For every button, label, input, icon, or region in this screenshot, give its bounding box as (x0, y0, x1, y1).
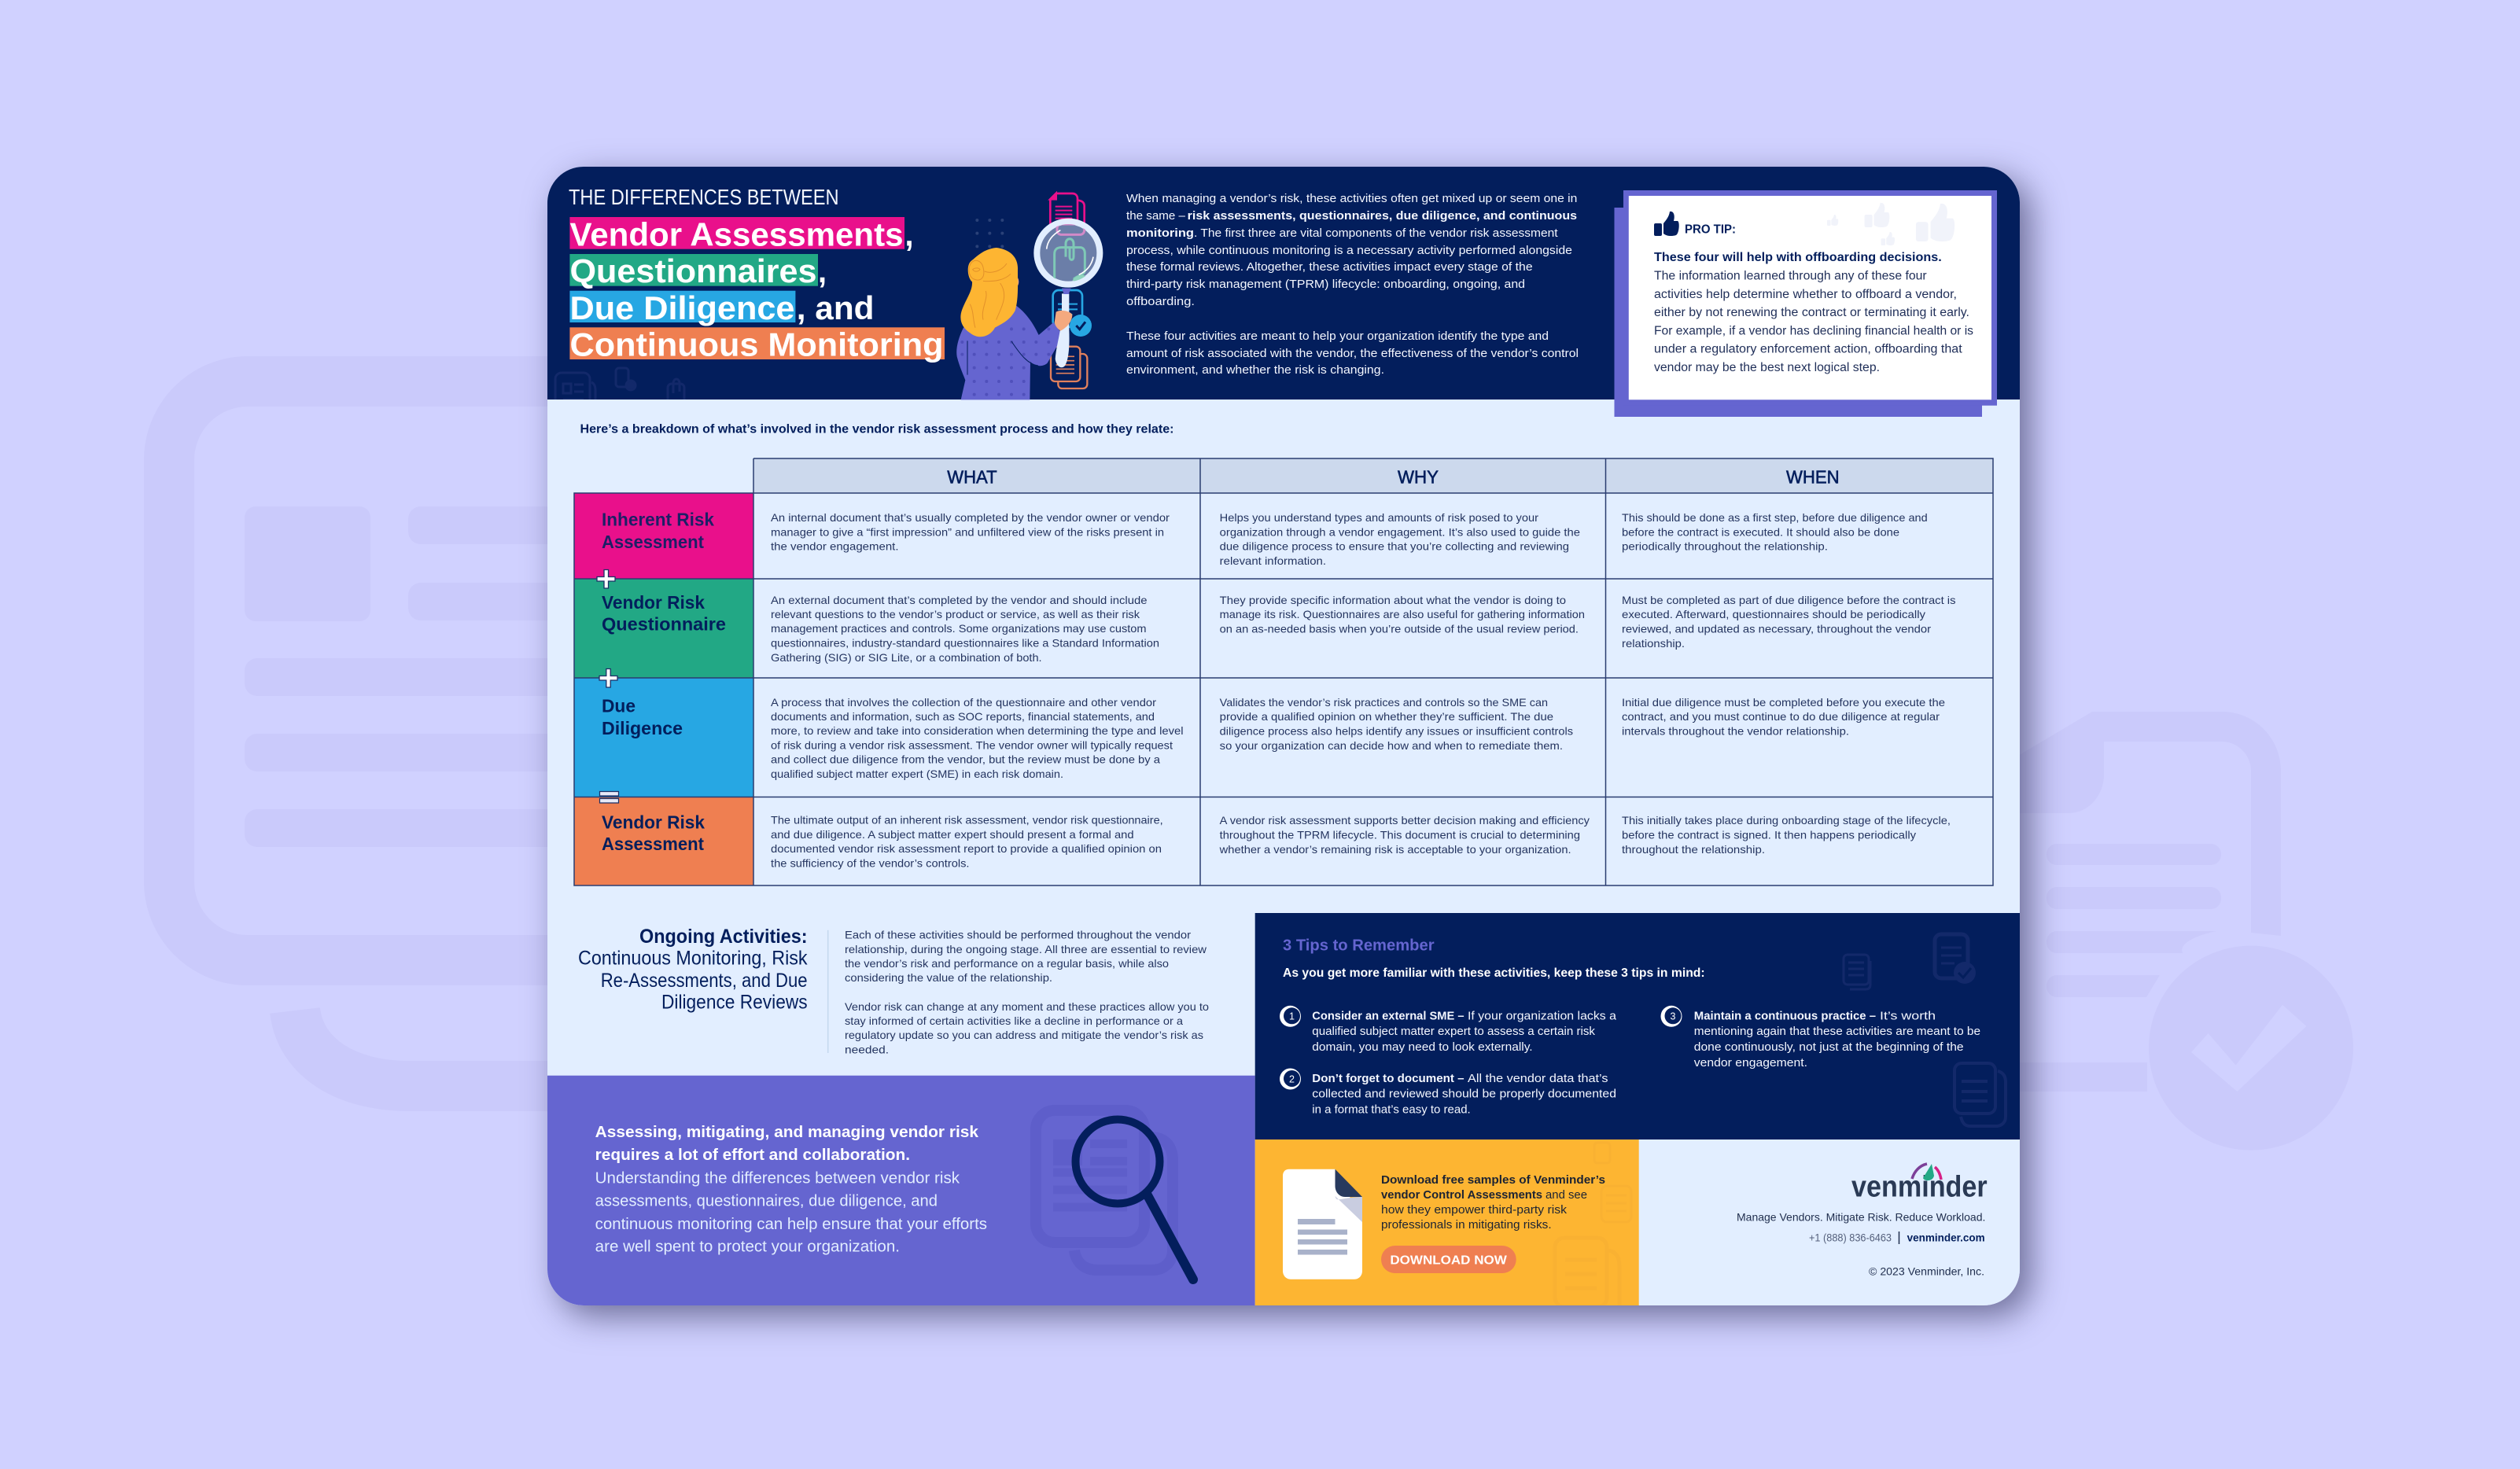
why column text: due diligence process to ensure that you’re collecting and reviewing (1220, 539, 1569, 552)
why column text: They provide specific information about what the vendor is doing to (1220, 594, 1566, 606)
tip 1: qualified subject matter expert to assess a certain risk (1312, 1025, 1595, 1038)
what column text: relevant questions to the vendor’s product or service, as well as their risk (771, 608, 1140, 620)
intro text: offboarding. (1126, 295, 1195, 308)
when column text: contract, and you must continue to do due diligence at regular (1622, 710, 1940, 723)
when column text: Initial due diligence must be completed before you execute the (1622, 696, 1945, 709)
intro text: . The first three are vital components of the vendor risk assessment (1194, 226, 1558, 240)
ghost tip icons (1844, 934, 2006, 1126)
table header row: WHEN (1786, 467, 1840, 488)
closing text: are well spent to protect your organization. (595, 1238, 900, 1255)
contact line (1809, 1232, 1985, 1244)
tagline: Manage Vendors. Mitigate Risk. Reduce Workload. (1737, 1211, 1985, 1224)
tip 3: done continuously, not just at the beginning of the (1694, 1040, 1964, 1054)
tips intro: As you get more familiar with these activities, keep these 3 tips in mind: (1283, 966, 1705, 980)
tip 2: All the vendor data that’s (1468, 1072, 1608, 1085)
row label: inherent risk assessment (574, 493, 753, 579)
row label: vendor risk questionnaire: Vendor Risk (602, 592, 705, 613)
intro text: risk assessments, questionnaires, due diligence, and continuous (1188, 209, 1577, 223)
what column text: The ultimate output of an inherent risk assessment, vendor risk questionnaire, (771, 813, 1163, 826)
closing text: Understanding the differences between vendor risk (595, 1170, 960, 1187)
when column text (1622, 511, 1955, 856)
intro text: When managing a vendor’s risk, these activities often get mixed up or seem one in (1126, 192, 1577, 205)
panel: 3 tips to remember (1255, 913, 2021, 1139)
tip 1: If your organization lacks a (1468, 1010, 1617, 1022)
why column text: manage its risk. Questionnaires are also useful for gathering information (1220, 608, 1585, 620)
title: highlighted terms: , (818, 252, 827, 289)
tip 3: Maintain a continuous practice – (1694, 1010, 1876, 1022)
ongoing activities text: relationship, during the ongoing stage. All three are essential to review (845, 943, 1207, 955)
pro tip body: vendor may be the best next logical step. (1654, 361, 1880, 374)
magnifying glass (1056, 293, 1070, 367)
row label: vendor risk questionnaire (574, 579, 753, 678)
what column text: qualified subject matter expert (SME) in each risk domain. (771, 768, 1063, 780)
woman body (956, 305, 1063, 399)
intro text: environment, and whether the risk is changing. (1126, 363, 1384, 377)
tip 1 (1280, 1006, 1617, 1054)
tip 3 (1661, 1006, 1980, 1070)
pro tip label: PRO TIP: (1685, 223, 1736, 237)
row label: vendor risk assessment (574, 797, 753, 885)
contact line: +1 (888) 836-6463 (1809, 1232, 1892, 1244)
intro text: these formal reviews. Altogether, these activities impact every stage of the (1126, 260, 1533, 274)
tip 1: domain, you may need to look externally. (1312, 1040, 1533, 1054)
what column text: of risk during a vendor risk assessment. The vendor owner will typically request (771, 739, 1173, 752)
operator: plus (597, 569, 615, 588)
tip 2: collected and reviewed should be properly documented (1312, 1087, 1616, 1101)
row label: inherent risk assessment: Inherent Risk (602, 510, 714, 530)
row label: vendor risk questionnaire: Questionnaire (602, 613, 726, 634)
why column text: provide a qualified opinion on whether they’re sufficient. The due (1220, 710, 1553, 723)
table header row (753, 458, 1993, 493)
what column text: documents and information, such as SOC reports, financial statements, and (771, 710, 1155, 723)
icon: document (1283, 1169, 1362, 1279)
intro text (1126, 192, 1579, 377)
panel: download call to action (1255, 1139, 1639, 1307)
download text: and see (1546, 1188, 1587, 1202)
closing text: continuous monitoring can help ensure that your efforts (595, 1216, 987, 1233)
icon: magenta document (1050, 193, 1085, 228)
tip 3: It’s worth (1880, 1010, 1936, 1022)
panel: ongoing activities heading: Re-Assessments, and Due (601, 970, 808, 992)
ongoing activities text (845, 928, 1209, 1055)
what column text: the sufficiency of the vendor’s controls. (771, 857, 969, 870)
infographic card (547, 167, 2020, 1305)
copyright: © 2023 Venminder, Inc. (1869, 1265, 1984, 1277)
intro text: third-party risk management (TPRM) lifecycle: onboarding, ongoing, and (1126, 278, 1525, 291)
when column text: before the contract is signed. It then happens periodically (1622, 829, 1916, 841)
what column text: management practices and controls. Some organizations may use custom (771, 622, 1147, 635)
what column text: documented vendor risk assessment report to provide a qualified opinion on (771, 842, 1162, 855)
icon: ghost document (1036, 1110, 1173, 1270)
when column text: before the contract is executed. It should also be done (1622, 525, 1899, 538)
icon: blue document with check (1053, 290, 1092, 337)
when column text: executed. Afterward, questionnaires should be periodically (1622, 608, 1925, 620)
pro tip body: under a regulatory enforcement action, offboarding that (1654, 343, 1962, 355)
when column text: Must be completed as part of due diligence before the contract is (1622, 594, 1955, 606)
when column text: reviewed, and updated as necessary, throughout the vendor (1622, 623, 1931, 635)
closing text (595, 1124, 987, 1255)
button: download now: DOWNLOAD NOW (1390, 1254, 1508, 1268)
what column text (771, 511, 1184, 870)
ongoing activities text: Each of these activities should be performed throughout the vendor (845, 928, 1191, 941)
tip 2: in a format that’s easy to read. (1312, 1103, 1471, 1117)
row label: due diligence: Due (602, 695, 636, 716)
title: highlighted terms: , (904, 216, 914, 253)
tip 1: Consider an external SME – (1312, 1010, 1464, 1022)
why column text: so your organization can decide how and when to remediate them. (1220, 739, 1563, 752)
download text: how they empower third-party risk (1381, 1203, 1568, 1217)
panel: ongoing activities heading: Ongoing Activities: (639, 926, 808, 948)
what column text: A process that involves the collection of the questionnaire and other vendor (771, 696, 1156, 709)
tip 2: Don’t forget to document – (1312, 1072, 1464, 1085)
closing text: assessments, questionnaires, due diligence, and (595, 1192, 938, 1209)
row label: inherent risk assessment: Assessment (602, 532, 704, 552)
when column text: periodically throughout the relationship. (1622, 539, 1828, 552)
woman hair (960, 248, 1018, 337)
table (574, 458, 1993, 885)
table grid (574, 458, 1993, 885)
intro text: amount of risk associated with the vendor, the effectiveness of the vendor’s control (1126, 347, 1579, 360)
pro tip body: activities help determine whether to offboard a vendor, (1654, 288, 1957, 301)
operator: plus (599, 668, 617, 687)
tip 3: mentioning again that these activities are meant to be (1694, 1025, 1980, 1038)
title: highlighted terms (569, 216, 945, 363)
why column text: on an as-needed basis when you’re outside of the usual review period. (1220, 623, 1579, 635)
what column text: and due diligence. A subject matter expert should present a formal and (771, 828, 1134, 841)
what column text: more, to review and take into consideration when determining the type and level (771, 724, 1184, 737)
row label: due diligence: Diligence (602, 718, 683, 738)
logo: venminder: venminder (1851, 1171, 1988, 1204)
why column text: A vendor risk assessment supports better decision making and efficiency (1220, 814, 1590, 827)
icon: magnifying glass (1076, 1120, 1193, 1279)
what column text: questionnaires, industry-standard questionnaires like a Standard Information (771, 637, 1159, 650)
row label: vendor risk assessment: Assessment (602, 834, 704, 854)
title: highlighted terms: , and (797, 289, 875, 326)
why column text: relevant information. (1220, 554, 1326, 567)
download text (1381, 1173, 1605, 1232)
when column text: relationship. (1622, 637, 1685, 650)
panel: pro tip (1614, 190, 1997, 417)
download text: professionals in mitigating risks. (1381, 1218, 1552, 1232)
panel: closing statement (547, 1076, 1255, 1305)
closing text: Assessing, mitigating, and managing vendor risk (595, 1124, 979, 1141)
heading: the differences between: THE DIFFERENCES BETWEEN (569, 185, 838, 209)
why column text: whether a vendor’s remaining risk is acceptable to your organization. (1219, 843, 1571, 856)
card shadow (547, 167, 2020, 1305)
why column text: throughout the TPRM lifecycle. This document is crucial to determining (1220, 829, 1580, 841)
contact line: venminder.com (1907, 1232, 1985, 1244)
ongoing activities text: the vendor’s risk and performance on a regular basis, while also (845, 957, 1169, 970)
intro text: These four activities are meant to help your organization identify the type and (1126, 330, 1549, 343)
ongoing activities text: considering the value of the relationship. (845, 971, 1052, 984)
title: highlighted terms: Continuous Monitoring (569, 326, 944, 363)
what column text: the vendor engagement. (771, 539, 898, 552)
intro text: monitoring (1126, 226, 1194, 240)
what column text: Gathering (SIG) or SIG Lite, or a combination of both. (771, 651, 1042, 664)
panel: ongoing activities heading (578, 926, 808, 1014)
panel: ongoing activities heading: Diligence Reviews (661, 992, 808, 1014)
why column text: Validates the vendor’s risk practices and controls so the SME can (1220, 696, 1548, 709)
why column text: organization through a vendor engagement. It’s also used to guide the (1220, 525, 1580, 538)
pro tip body: The information learned through any of these four (1654, 269, 1927, 283)
when column text: This initially takes place during onboarding stage of the lifecycle, (1622, 814, 1951, 827)
download text: Download free samples of Venminder’s (1381, 1173, 1605, 1187)
what column text: manager to give a “first impression” and unfiltered view of the risks present in (771, 525, 1164, 538)
when column text: This should be done as a first step, before due diligence and (1622, 511, 1928, 524)
when column text: intervals throughout the vendor relationship. (1622, 725, 1849, 738)
ongoing activities text: stay informed of certain activities like a decline in performance or a (845, 1014, 1183, 1027)
pro tip body (1654, 251, 1973, 374)
tip 1: 1 (1289, 1011, 1295, 1022)
pro tip body: For example, if a vendor has declining financial health or is (1654, 324, 1973, 338)
panel: ongoing activities heading: Continuous Monitoring, Risk (578, 948, 808, 970)
ongoing activities text: regulatory update so you can address and mitigate the vendor’s risk as (845, 1029, 1203, 1041)
tip 3: 3 (1671, 1011, 1676, 1022)
what column text: and collect due diligence from the vendor, but the review must be done by a (771, 753, 1160, 766)
tip 2: 2 (1289, 1074, 1295, 1085)
why column text (1219, 511, 1590, 856)
closing text: requires a lot of effort and collaboration. (595, 1147, 910, 1164)
illustration: woman with magnifying glass and documents (956, 193, 1100, 399)
title: highlighted terms: Questionnaires (569, 252, 816, 289)
tips heading: 3 Tips to Remember (1283, 937, 1435, 955)
why column text: Helps you understand types and amounts of risk posed to your (1220, 511, 1538, 524)
icon: orange documents (1051, 347, 1087, 388)
intro text: the same – (1126, 209, 1186, 223)
tip 2 (1280, 1068, 1616, 1117)
ongoing activities text: Vendor risk can change at any moment and these practices allow you to (845, 1000, 1209, 1013)
ongoing activities text: needed. (845, 1043, 889, 1055)
icon: thumbs up (1654, 212, 1679, 236)
ghost header icons (554, 366, 686, 399)
header panel (547, 167, 2020, 415)
why column text: diligence process also helps identify any issues or insufficient controls (1220, 725, 1573, 738)
what column text: An internal document that’s usually completed by the vendor owner or vendor (771, 511, 1170, 524)
when column text: throughout the relationship. (1622, 843, 1765, 856)
row label: due diligence (574, 678, 753, 797)
pro tip body: either by not renewing the contract or terminating it early. (1654, 306, 1969, 319)
breakdown heading: Here’s a breakdown of what’s involved in the vendor risk assessment process and how they relate: (580, 423, 1173, 436)
operator: equals (599, 791, 618, 803)
intro text: process, while continuous monitoring is a necessary activity performed alongside (1126, 244, 1572, 257)
pro tip body: These four will help with offboarding decisions. (1654, 251, 1942, 264)
table header row: WHY (1398, 467, 1439, 488)
panel: venminder footer (1737, 1164, 1988, 1277)
table header row: WHAT (947, 467, 997, 488)
download text: vendor Control Assessments (1381, 1188, 1542, 1202)
tip 3: vendor engagement. (1694, 1056, 1807, 1070)
woman face (1018, 278, 1019, 286)
button: download now (1381, 1246, 1516, 1273)
title: highlighted terms: Due Diligence (569, 289, 794, 326)
row label: vendor risk assessment: Vendor Risk (602, 812, 705, 832)
what column text: An external document that’s completed by the vendor and should include (771, 594, 1148, 606)
title: highlighted terms: Vendor Assessments (569, 216, 903, 253)
